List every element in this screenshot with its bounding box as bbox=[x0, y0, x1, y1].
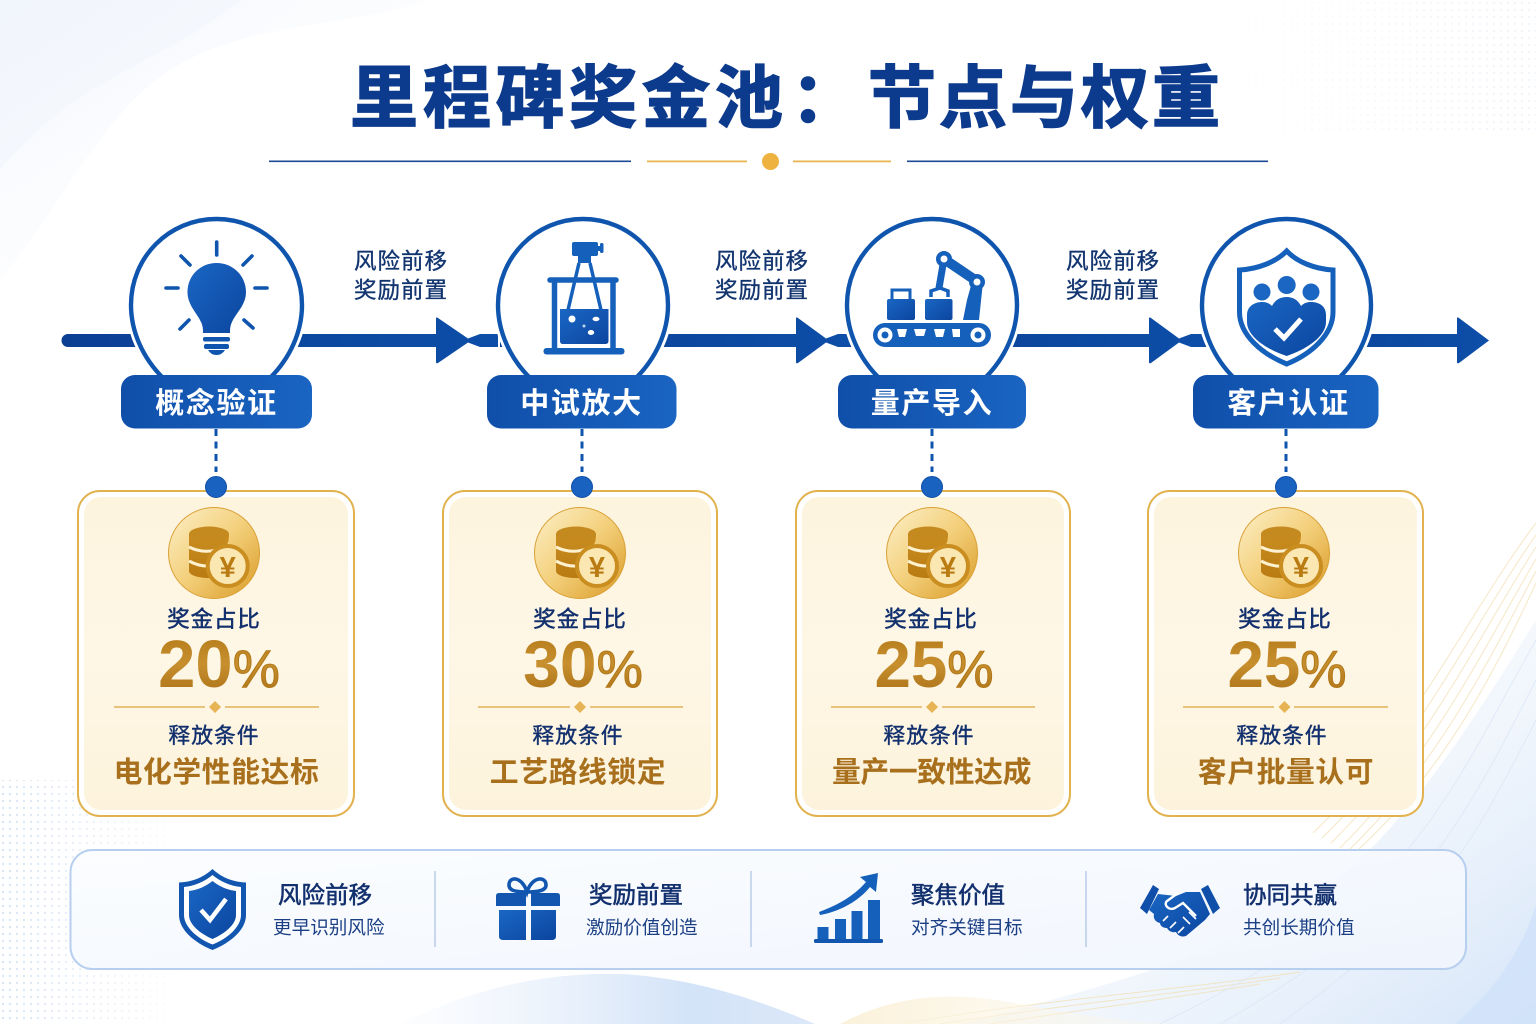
benefit text: collaboration bbox=[1243, 882, 1355, 938]
stage label 1 bbox=[121, 375, 312, 428]
release condition 2: 工艺路线锁定 bbox=[490, 757, 666, 789]
release condition 4: 客户批量认可 bbox=[1198, 757, 1374, 789]
title: 里程碑奖金池 bbox=[350, 61, 788, 137]
icon: handshake bbox=[1140, 885, 1220, 937]
stage label 4 bbox=[1193, 375, 1378, 428]
icon: flask in beaker bbox=[544, 242, 624, 354]
benefit text: incentive: 奖励前置 bbox=[589, 882, 683, 908]
flow label 1 bbox=[354, 249, 448, 303]
icon: coins 3: ¥ bbox=[940, 552, 956, 584]
connector dot 1 bbox=[206, 476, 226, 498]
benefit text: value focus bbox=[911, 882, 1023, 938]
circle outline 3 bbox=[847, 219, 1017, 378]
node 1: concept validation bbox=[121, 219, 312, 472]
circle badge 4 bbox=[1202, 219, 1371, 378]
connector 2 bbox=[580, 429, 584, 472]
icon: coins 2 bbox=[534, 508, 626, 598]
node 2: pilot scale-up bbox=[487, 219, 676, 472]
icon: coins 1 bbox=[168, 508, 260, 598]
circle outline 4 bbox=[1202, 219, 1371, 378]
flow label 3: 奖励前置 bbox=[1066, 278, 1160, 303]
connector dot 2 bbox=[572, 476, 592, 498]
card 3 bbox=[796, 491, 1070, 816]
stage label 4: 客户认证 bbox=[1227, 387, 1350, 420]
icon: gift box bbox=[496, 879, 560, 940]
circle badge 2 bbox=[498, 219, 668, 378]
circle outline 1 bbox=[131, 219, 302, 378]
circle badge 3 bbox=[847, 219, 1017, 378]
flow label 1: 风险前移 bbox=[354, 249, 448, 274]
icon: coins 2: ¥ bbox=[589, 552, 605, 584]
node 4: customer certification bbox=[1193, 219, 1378, 472]
node 3: mass production bbox=[838, 219, 1026, 472]
icon: coins 1: ¥ bbox=[220, 552, 236, 584]
flow label 1: 奖励前置 bbox=[354, 278, 448, 303]
title: ： bbox=[791, 61, 859, 137]
connector 1 bbox=[214, 429, 218, 472]
benefit text: risk shift: 风险前移 bbox=[278, 882, 372, 908]
card 1 bbox=[78, 491, 354, 816]
divider 3 bbox=[831, 701, 1035, 713]
flow label 3 bbox=[1066, 249, 1160, 303]
connector dot 3 bbox=[922, 476, 942, 498]
benefit text: incentive: 激励价值创造 bbox=[586, 917, 698, 938]
timeline arrow line bbox=[62, 317, 1489, 363]
icon: coins 4: ¥ bbox=[1293, 552, 1309, 584]
icon: light bulb bbox=[166, 242, 267, 355]
flow label 2 bbox=[715, 249, 809, 303]
divider 1 bbox=[114, 701, 319, 713]
bottom summary panel bbox=[70, 850, 1466, 969]
bonus share label 1: 奖金占比 bbox=[167, 607, 261, 632]
benefit text: value focus: 对齐关键目标 bbox=[911, 917, 1023, 938]
release label 4: 释放条件 bbox=[1236, 723, 1328, 748]
benefit text: collaboration: 协同共赢 bbox=[1243, 882, 1337, 908]
stage label 2 bbox=[487, 375, 676, 428]
title divider bbox=[269, 153, 1268, 170]
icon: coins 3 bbox=[886, 508, 978, 598]
release label 2: 释放条件 bbox=[532, 723, 624, 748]
stage label 3: 量产导入 bbox=[871, 387, 993, 420]
stage label 2: 中试放大 bbox=[520, 387, 643, 420]
icon: shield with people bbox=[1240, 251, 1333, 364]
circle outline 2 bbox=[498, 219, 668, 378]
divider 4 bbox=[1183, 701, 1388, 713]
flow label 3: 风险前移 bbox=[1066, 249, 1160, 274]
icon: shield check bbox=[179, 869, 246, 950]
benefit text: collaboration: 共创长期价值 bbox=[1243, 917, 1355, 938]
card 2 bbox=[443, 491, 717, 816]
bonus share value 3: 25% bbox=[874, 628, 994, 701]
benefit text: risk shift: 更早识别风险 bbox=[273, 917, 385, 938]
title: 节点与权重 bbox=[868, 61, 1223, 137]
connector dot 4 bbox=[1276, 476, 1296, 498]
release label 3: 释放条件 bbox=[883, 723, 975, 748]
bonus share label 4: 奖金占比 bbox=[1238, 607, 1332, 632]
connector 4 bbox=[1284, 429, 1288, 472]
flow label 2: 奖励前置 bbox=[715, 278, 809, 303]
benefit text: value focus: 聚焦价值 bbox=[911, 882, 1005, 908]
stage label 1: 概念验证 bbox=[155, 386, 278, 420]
flow label 2: 风险前移 bbox=[715, 249, 809, 274]
benefit text: risk shift bbox=[273, 882, 385, 938]
divider 2 bbox=[478, 701, 683, 713]
release label 1: 释放条件 bbox=[168, 723, 260, 748]
icon: bar chart with arrow bbox=[814, 873, 883, 943]
bonus share value 2: 30% bbox=[523, 627, 643, 701]
bonus share label 2: 奖金占比 bbox=[533, 607, 627, 632]
release condition 3: 量产一致性达成 bbox=[832, 757, 1032, 789]
bonus share value 1: 20% bbox=[158, 627, 280, 702]
icon: coins 4 bbox=[1238, 508, 1330, 598]
stage label 3 bbox=[838, 375, 1026, 428]
release condition 1: 电化学性能达标 bbox=[114, 757, 319, 789]
card 4 bbox=[1148, 491, 1423, 816]
bonus share value 4: 25% bbox=[1227, 628, 1347, 701]
icon: robot arm and conveyor bbox=[873, 251, 991, 347]
connector 3 bbox=[930, 429, 934, 472]
bonus share label 3: 奖金占比 bbox=[884, 607, 978, 632]
benefit text: incentive bbox=[586, 882, 698, 938]
circle badge 1 bbox=[131, 219, 302, 378]
